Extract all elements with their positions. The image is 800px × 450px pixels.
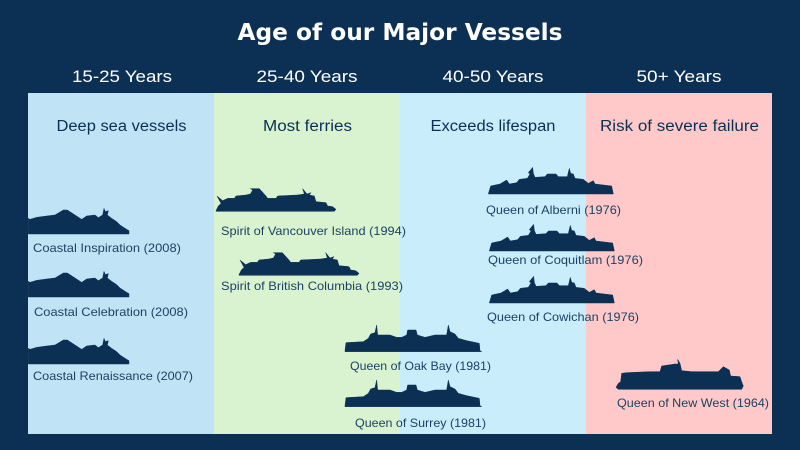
- vessel: Queen of Alberni: Queen of Alberni (1976): [486, 203, 621, 217]
- vessel: Spirit of Vancouver Island: [216, 189, 406, 238]
- panel heading: Risk of severe failure: Risk of severe failure: [600, 118, 759, 135]
- panel heading: Exceeds lifespan: Exceeds lifespan: [430, 118, 556, 135]
- panel: 50+ years: [586, 93, 772, 434]
- title: Age of our Major Vessels: [238, 20, 562, 46]
- panel heading: Most ferries: Most ferries: [263, 118, 352, 135]
- column header: 50+ Years: 50+ Years: [636, 67, 722, 86]
- vessel: Spirit of Vancouver Island: Spirit of Vancouver Island (1994): [221, 224, 406, 238]
- panel: 15-25 years: [28, 93, 214, 434]
- vessel: Queen of Cowichan: Queen of Cowichan (1976): [487, 310, 639, 324]
- vessel: Coastal Inspiration: Coastal Inspiration (2008): [33, 241, 181, 255]
- vessel: Queen of Surrey: [345, 380, 486, 430]
- vessel: Queen of Cowichan: [487, 276, 639, 324]
- panel heading: Deep sea vessels: Deep sea vessels: [56, 118, 187, 135]
- vessel: Queen of Oak Bay: Queen of Oak Bay (1981): [350, 359, 491, 373]
- vessel: Queen of Alberni: [486, 167, 621, 217]
- vessel: Queen of Coquitlam: Queen of Coquitlam (1976): [488, 253, 643, 267]
- vessel: Coastal Renaissance: Coastal Renaissance (2007): [33, 369, 193, 383]
- panel: 25-40 years: [214, 93, 400, 434]
- vessel: Spirit of British Columbia: Spirit of British Columbia (1993): [221, 279, 403, 293]
- column header: 40-50 Years: 40-50 Years: [442, 67, 544, 86]
- vessel: Coastal Celebration: Coastal Celebration (2008): [34, 305, 188, 319]
- vessel: Coastal Celebration: [28, 271, 188, 319]
- vessel: Queen of Oak Bay: [345, 325, 491, 373]
- vessel: Spirit of British Columbia: [221, 253, 403, 293]
- vessel: Queen of New West: Queen of New West (1964): [617, 396, 769, 410]
- vessel: Queen of New West: [616, 359, 769, 410]
- vessel: Coastal Inspiration: [28, 208, 181, 255]
- column header: 25-40 Years: 25-40 Years: [256, 67, 358, 86]
- vessel: Coastal Renaissance: [28, 338, 193, 383]
- column header: 15-25 Years: 15-25 Years: [72, 67, 172, 86]
- vessel: Queen of Coquitlam: [488, 224, 643, 267]
- panel: 40-50 years: [400, 93, 586, 434]
- vessel: Queen of Surrey: Queen of Surrey (1981): [355, 416, 486, 430]
